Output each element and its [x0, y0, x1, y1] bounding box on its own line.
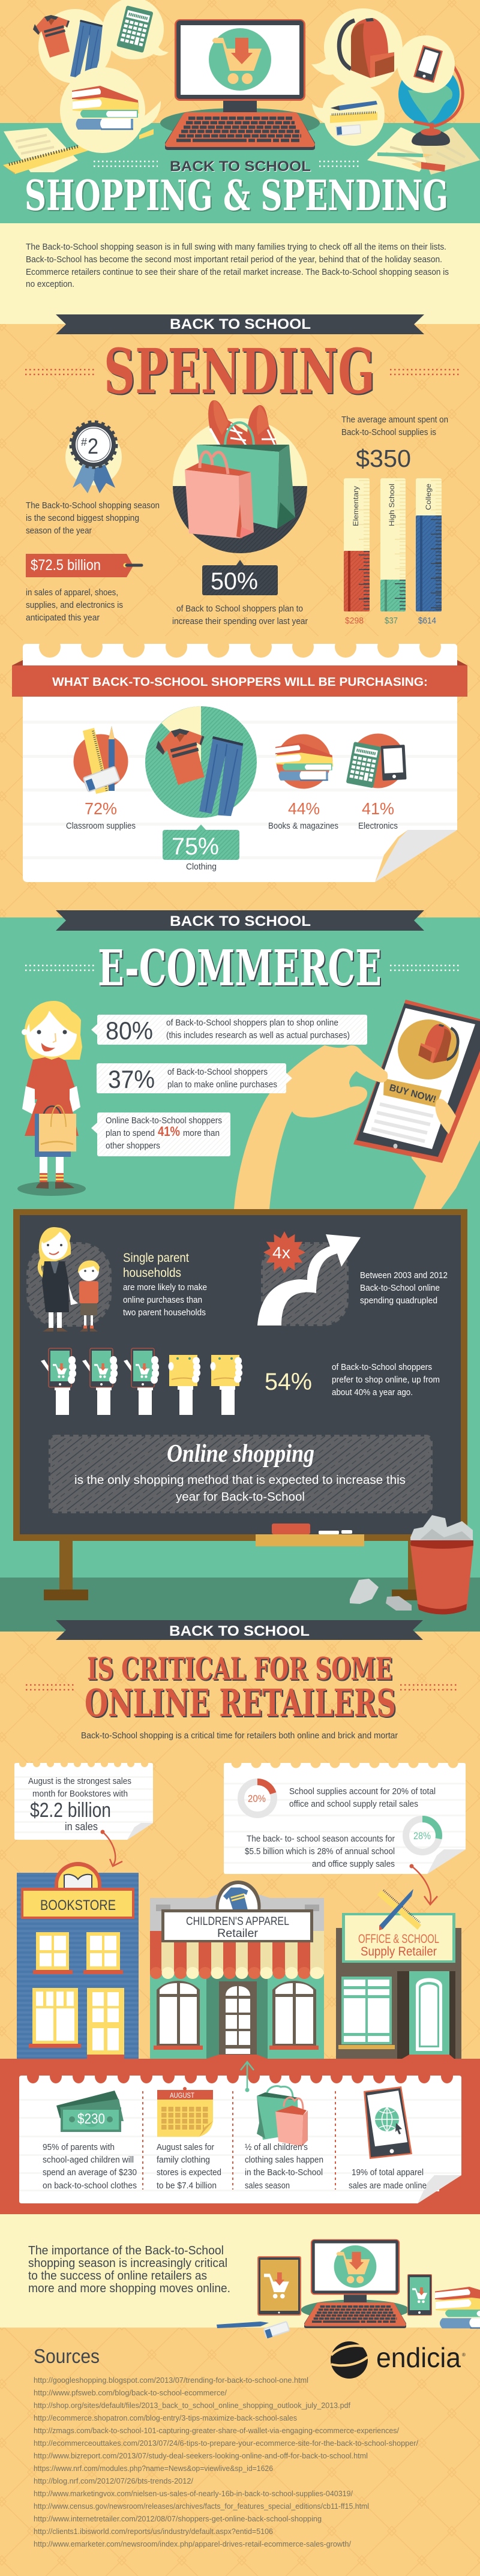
illustration: children's apparel store	[150, 1881, 324, 2059]
callout: 50 percent: 50%	[211, 568, 258, 595]
text: increase spending: increase their spending over last year	[172, 617, 308, 626]
text: spending quadrupled	[360, 1271, 448, 1306]
icon: calculator bubble	[103, 0, 169, 59]
item: clothing: Clothing	[186, 862, 217, 872]
icon: shirt and jeans bubble	[33, 9, 112, 83]
callout: spend 41 percent more: 41%	[158, 1124, 180, 1139]
column: phone online	[349, 2086, 427, 2191]
text: source list: http://www.pfsweb.com/blog/back-to-school-ecommerce/	[34, 2389, 227, 2397]
column: august calendar: to be $7.4 billion	[157, 2181, 217, 2191]
chart: donut 20 percent	[241, 1782, 274, 1815]
column: august calendar: stores is expected	[157, 2168, 221, 2178]
item: clothing: 75%	[172, 833, 219, 860]
text: source list: http://www.census.gov/newsroom/releases/archives/facts_for_features_special_editions/cb11-ff15.html	[34, 2502, 369, 2511]
chart: donut 20 percent: 20%	[248, 1793, 266, 1804]
text: second biggest season: is the second biggest shopping	[26, 514, 139, 523]
icon: tablet	[257, 2256, 301, 2316]
column: 230 dollars: 95% of parents with	[43, 2143, 115, 2152]
chart: five hands pictogram	[41, 1348, 242, 1415]
icon: phone	[407, 2274, 432, 2316]
text: second biggest season: season of the year	[26, 526, 92, 536]
panel: school supplies note: The back- to- school season accounts for	[247, 1834, 395, 1844]
text: online shopping: Online shopping	[167, 1440, 314, 1468]
illustration: shopping bags with shoes	[173, 400, 307, 553]
column: 230 dollars: school-aged children will	[43, 2155, 134, 2165]
column: 230 dollars: on back-to-school clothes	[43, 2181, 137, 2191]
bar: college	[416, 478, 442, 626]
arrow: note to supply store	[409, 1864, 437, 1905]
item: books and magazines: Books & magazines	[268, 821, 338, 831]
icon: chalk ledge and eraser	[256, 1524, 364, 1546]
logo: endicia	[331, 2341, 466, 2379]
illustration: office and school supply store: OFFICE & SCHOOL	[358, 1932, 439, 1946]
text: source list: http://zmags.com/back-to-school-101-capturing-greater-share-of-wallet-via-engaging-ecommerce-experiences/	[34, 2427, 400, 2435]
text: increase spending	[172, 604, 308, 626]
callout: spend 41 percent more: Online Back-to-School shoppers	[106, 1116, 222, 1126]
text: second biggest season: The Back-to-School shopping season	[26, 501, 160, 511]
column: 230 dollars: spend an average of $230	[43, 2168, 137, 2178]
text: source list: http://www.marketingvox.com/nielsen-us-sales-of-nearly-16b-in-back-to-school-supplies-040319/	[34, 2490, 353, 2498]
bar: elementary: Elementary	[352, 486, 360, 526]
text: retailers subtitle: Back-to-School shopping is a critical time for retailers both online and brick and mortar	[81, 1731, 398, 1741]
item: books and magazines: 44%	[288, 799, 320, 818]
arrow: facts to apparel store	[241, 2062, 254, 2092]
icon: pencil ruler eraser bubble	[312, 83, 385, 146]
bar: elementary	[344, 478, 370, 626]
chart: donut 28 percent	[406, 1819, 439, 1852]
item: electronics: Electronics	[358, 821, 398, 831]
callout: 80 percent: of Back-to-School shoppers plan to shop online	[166, 1018, 338, 1028]
intro text: Back-to-School has become the second most important retail period of the year, behind that of the holiday season.	[26, 254, 442, 265]
text: single parent households: are more likely to make	[123, 1283, 207, 1293]
bar: college: $614	[418, 616, 436, 626]
panel: bookstore note	[14, 1760, 153, 1840]
callout: 37 percent: plan to make online purchases	[167, 1080, 277, 1090]
text: single parent households	[123, 1251, 207, 1318]
stat: 54 percent: prefer to shop online, up from	[332, 1375, 440, 1385]
item: clothing	[145, 706, 257, 872]
callout: spend 41 percent more	[91, 1112, 230, 1156]
column: phone online: 19% of total apparel	[352, 2168, 424, 2178]
column: shopping bags: in the Back-to-School	[245, 2168, 323, 2178]
icon: computer	[301, 2239, 409, 2328]
panel: what shoppers will be purchasing	[12, 636, 467, 882]
column: august calendar: family clothing	[157, 2155, 210, 2165]
bar: college: College	[424, 484, 433, 510]
panel: bookstore note: in sales	[65, 1821, 98, 1833]
arrow: note to bookstore	[101, 1830, 122, 1866]
callout: 80 percent	[91, 1015, 367, 1045]
column: phone online: sales are made online	[349, 2181, 427, 2191]
hero illustration	[3, 0, 480, 175]
text: conclusion: more and more shopping moves online.	[28, 2282, 230, 2295]
panel: bookstore note: August is the strongest sales	[28, 1777, 131, 1786]
callout: 50 percent	[202, 560, 278, 595]
icon: books	[435, 2287, 480, 2329]
heading: spending: SPENDING	[104, 335, 375, 408]
column: shopping bags	[245, 2086, 323, 2191]
panel: school supplies note: and office supply sales	[312, 1860, 395, 1869]
text: source list: http://ecommerce.shopatron.com/blog-entry/3-tips-maximize-back-school-sales	[34, 2414, 297, 2422]
icon: backpack on tablet	[418, 1021, 461, 1067]
text: average spent	[341, 415, 448, 472]
chart: ruler bars	[344, 478, 442, 626]
text: source list: http://www.internetretailer.com/2012/08/07/shoppers-get-online-back-school-shopping	[34, 2515, 322, 2523]
heading: is critical for some online retailers	[26, 1651, 459, 1725]
text: average spent: $350	[356, 445, 411, 472]
illustration: girl with shopping bags	[17, 1001, 86, 1196]
text: increase spending: of Back to School shoppers plan to	[176, 604, 303, 614]
callout: 37 percent	[97, 1063, 292, 1093]
icon: crossed ruler and pencil	[377, 1889, 421, 1930]
icon: pencil	[217, 2322, 269, 2328]
intro text	[26, 242, 449, 289]
icon: crumpled paper on floor	[350, 1579, 412, 1611]
text: second biggest season	[26, 501, 160, 536]
price tag: 72.5 billion	[26, 554, 142, 577]
icon: desk papers and ruler left	[3, 128, 154, 174]
icon: blue shirt	[223, 1888, 248, 1915]
panel: retail facts	[19, 2069, 461, 2203]
bar: high school: High School	[388, 484, 396, 526]
intro text: The Back-to-School shopping season is in full swing with many families trying to check off all the items on their lists.	[26, 242, 446, 252]
intro text: no exception.	[26, 279, 74, 289]
callout: spend 41 percent more: other shoppers	[106, 1141, 160, 1151]
bar: high school: $37	[385, 616, 398, 626]
callout: 80 percent: 80%	[106, 1016, 153, 1045]
icon: number 2 rosette	[65, 422, 122, 493]
illustration: children's apparel store: CHILDREN'S APPAREL	[186, 1915, 289, 1928]
column: shopping bags: clothing sales happen	[245, 2155, 323, 2165]
column: shopping bags: ½ of all children's	[245, 2143, 308, 2152]
price tag: 72.5 billion: $72.5 billion	[31, 557, 101, 574]
panel: bookstore note: $2.2 billion	[30, 1799, 111, 1822]
icon: parent and child	[39, 1227, 100, 1332]
panel: school supplies note: School supplies account for 20% of total	[289, 1787, 436, 1797]
text: spending quadrupled: Back-to-School online	[360, 1283, 440, 1293]
item: electronics: 41%	[362, 799, 394, 818]
callout: 37 percent: 37%	[108, 1065, 155, 1093]
text: source list: http://www.bizreport.com/2013/07/study-deal-seekers-looking-online-and-off-for-back-to-school.html	[34, 2452, 368, 2460]
text: conclusion: shopping season is increasingly critical	[28, 2257, 227, 2270]
text: average spent: The average amount spent on	[341, 415, 448, 425]
banner: purchasing heading: WHAT BACK-TO-SCHOOL SHOPPERS WILL BE PURCHASING:	[52, 676, 428, 689]
illustration: office and school supply store: Supply Retailer	[361, 1945, 437, 1959]
icon: open book	[64, 1875, 92, 1893]
column: august calendar	[157, 2087, 221, 2191]
icon: rising arrow with 4x badge: 4x	[272, 1243, 290, 1262]
illustration: bookstore	[17, 1862, 139, 2059]
title: back to school: BACK TO SCHOOL	[170, 158, 311, 175]
panel: school supplies note: $5.5 billion which is 28% of annual school	[245, 1847, 395, 1857]
text: sales anticipated: supplies, and electronics is	[26, 601, 123, 610]
panel: school supplies note: office and school supply retail sales	[289, 1800, 418, 1809]
banner: purchasing heading	[12, 660, 467, 697]
text: source list: http://shop.org/sites/default/files/2013_back_to_school_online_shopping_outlook_july_2013.pdf	[34, 2401, 351, 2410]
icon: globe on stand	[367, 63, 480, 175]
text: source list: http://clients1.ibisworld.com/reports/us/industry/default.aspx?entid=5106	[34, 2527, 273, 2536]
column: 230 dollars: $230	[77, 2111, 105, 2127]
item: classroom supplies	[66, 726, 136, 831]
text: source list	[34, 2376, 419, 2548]
ribbon: back to school e-commerce: BACK TO SCHOOL	[170, 913, 311, 929]
stat: 54 percent: 54%	[265, 1369, 312, 1395]
text: source list: http://blog.nrf.com/2012/07/26/bts-trends-2012/	[34, 2477, 194, 2485]
callout: spend 41 percent more: plan to spend	[106, 1129, 155, 1138]
callout: 80 percent: (this includes research as well as actual purchases)	[166, 1031, 350, 1040]
ribbon: back to school spending	[56, 314, 424, 334]
icon: number 2 rosette: #	[81, 436, 87, 448]
callout: 37 percent: of Back-to-School shoppers	[167, 1067, 268, 1077]
text: source list: http://www.emarketer.com/newsroom/index.php/apparel-drives-retail-ecommerce-sales-growth/	[34, 2540, 352, 2548]
item: books and magazines	[268, 734, 338, 831]
icon: desk pencils	[377, 152, 445, 172]
logo: endicia: ®	[462, 2352, 466, 2358]
item: electronics	[346, 733, 407, 831]
text: single parent households: online purchases than	[123, 1296, 202, 1305]
illustration: hands holding tablet	[234, 1000, 480, 1209]
ribbon: back to school retailers: BACK TO SCHOOL	[169, 1623, 310, 1639]
illustration: office and school supply store	[336, 1889, 461, 2059]
text: spending quadrupled: spending quadrupled	[360, 1296, 437, 1306]
text: spending quadrupled: Between 2003 and 2012	[360, 1271, 448, 1280]
text: sales anticipated: in sales of apparel, shoes,	[26, 588, 118, 598]
illustration: bookstore: BOOKSTORE	[40, 1897, 116, 1914]
text: average spent: Back-to-School supplies is	[341, 428, 436, 437]
intro text: Ecommerce retailers continue to see their share of the retail market increase. The Back-to-School shopping season is	[26, 267, 449, 277]
text: single parent households: two parent households	[123, 1308, 206, 1318]
ribbon: back to school retailers	[56, 1620, 423, 1640]
logo: endicia: endicia	[376, 2342, 461, 2373]
text: conclusion	[28, 2244, 230, 2295]
text: online shopping: year for Back-to-School	[176, 1491, 305, 1504]
stat: 54 percent: about 40% a year ago.	[332, 1388, 413, 1398]
illustration: children's apparel store: Retailer	[217, 1927, 259, 1940]
blackboard	[13, 1209, 467, 1600]
item: classroom supplies: Classroom supplies	[66, 821, 136, 831]
text: conclusion: to the success of online retailers as	[28, 2269, 207, 2283]
illustration: hands holding tablet: BUY NOW!	[388, 1082, 437, 1105]
decorative title dots	[94, 161, 360, 166]
text: source list: https://www.nrf.com/modules.php?name=News&op=viewlive&sp_id=1626	[34, 2464, 273, 2473]
ribbon: back to school e-commerce	[56, 910, 424, 931]
icon: rising arrow with 4x badge	[257, 1231, 361, 1326]
text: single parent households: households	[123, 1266, 181, 1280]
text: sales anticipated: anticipated this year	[26, 613, 100, 623]
icon: sneakers	[208, 400, 278, 451]
icon: phone bubble	[397, 35, 455, 93]
column: august calendar: August sales for	[157, 2143, 214, 2152]
icon: computer with shopping cart	[160, 19, 320, 150]
awning	[150, 1931, 324, 1979]
column: august calendar: AUGUST	[170, 2091, 195, 2100]
icon: number 2 rosette: 2	[88, 434, 98, 458]
text: sales anticipated	[26, 588, 123, 623]
chart: donut 28 percent: 28%	[413, 1830, 431, 1842]
icon: eraser	[263, 2322, 289, 2338]
stat: 54 percent	[265, 1363, 440, 1398]
text: source list: http://googleshopping.blogspot.com/2013/07/trending-for-back-to-school-one.html	[34, 2376, 308, 2385]
item: classroom supplies: 72%	[85, 799, 117, 818]
panel: bookstore note: month for Bookstores with	[32, 1789, 128, 1799]
column: shopping bags: sales season	[245, 2181, 290, 2191]
panel: school supplies note	[224, 1758, 466, 1874]
icon: books bubble	[60, 67, 161, 153]
heading: sources: Sources	[34, 2345, 100, 2367]
ribbon: back to school spending: BACK TO SCHOOL	[170, 316, 311, 332]
text: source list: http://ecommerceouttakes.com/2013/07/24/6-tips-to-prepare-your-ecommerce-site-for-the-back-to-school-shopper/	[34, 2439, 419, 2448]
text: online shopping	[74, 1440, 406, 1504]
scribble backgrounds	[28, 1244, 431, 1512]
bar: elementary: $298	[345, 616, 364, 626]
illustration: devices	[217, 2239, 480, 2338]
column: 230 dollars	[43, 2091, 137, 2191]
icon: trash can with paper	[410, 1515, 473, 1614]
stat: 54 percent: of Back-to-School shoppers	[332, 1363, 432, 1372]
bar: high school	[380, 478, 406, 626]
icon: backpack bubble	[311, 8, 403, 88]
callout: spend 41 percent more: more than	[183, 1129, 220, 1138]
text: conclusion: The importance of the Back-to-School	[28, 2244, 224, 2257]
text: online shopping: is the only shopping method that is expected to increase this	[74, 1474, 406, 1487]
text: single parent households: Single parent	[123, 1251, 189, 1265]
